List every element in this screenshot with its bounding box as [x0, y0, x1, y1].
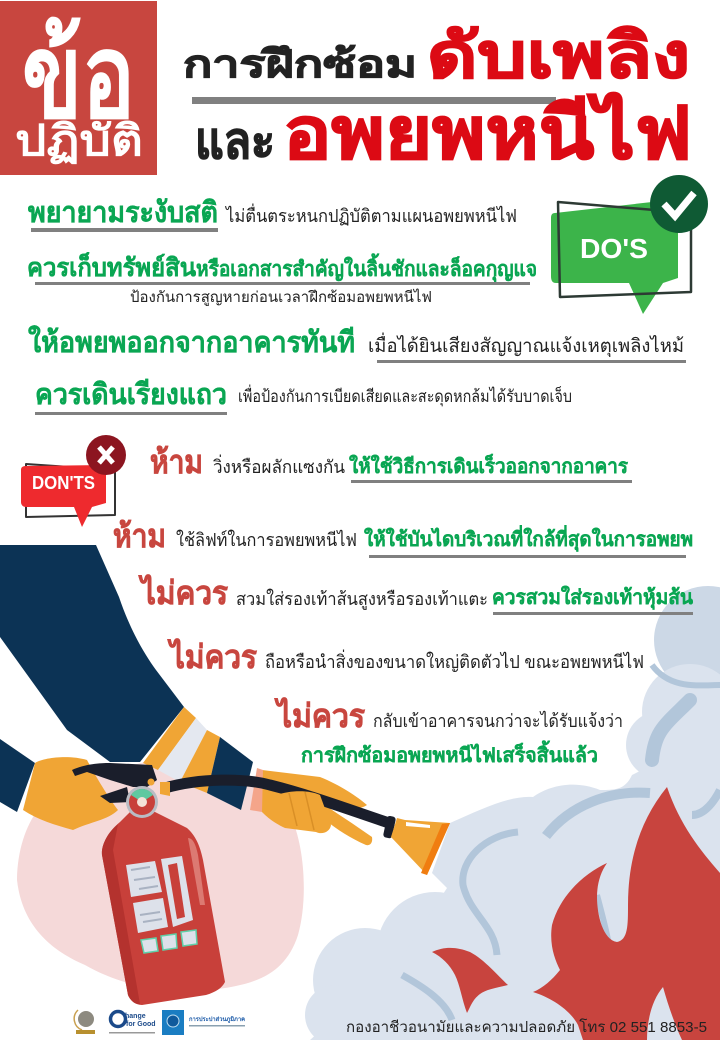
don't item 3 [138, 574, 693, 615]
illustration: left forearm sleeve [0, 739, 35, 812]
illustration: pink blob behind extinguisher [17, 757, 304, 991]
don't item 3: สวมใส่รองเท้าส้นสูงหรือรองเท้าแตะ [236, 588, 488, 610]
logo: provincial waterworks: การประปาส่วนภูมิภาค [189, 1015, 245, 1024]
do item 1: พยายามระงับสติ [28, 197, 218, 229]
extinguisher label panels [126, 861, 162, 897]
do item 3: ให้อพยพออกจากอาคารทันที [28, 325, 355, 359]
illustration: extinguisher body [102, 812, 225, 1005]
do item 2: ควรเก็บทรัพย์สิน [27, 252, 196, 282]
don't item 1: วิ่งหรือผลักแซงกัน [213, 454, 345, 477]
do item 2: ป้องกันการสูญหายก่อนเวลาฝึกซ้อมอพยพหนีไฟ [130, 288, 432, 306]
logo: change for good: hange [125, 1013, 146, 1020]
do item 4: ควรเดินเรียงแถว [35, 379, 227, 411]
icon: DO'S speech bubble: DO'S [580, 233, 648, 264]
illustration: nozzle [391, 818, 450, 875]
don't item 3: ควรสวมใส่รองเท้าหุ้มส้น [492, 585, 693, 610]
don't item 2: ให้ใช้บันไดบริเวณที่ใกล้ที่สุดในการอพยพ [364, 524, 693, 552]
do item 4: เพื่อป้องกันการเบียดเสียดและสะดุดหกล้มได้รับบาดเจ็บ [238, 384, 572, 407]
don't item 2: ใช้ลิฟท์ในการอพยพหนีไฟ [176, 529, 357, 550]
illustration: right glove palm [262, 770, 367, 812]
illustration: small flame [432, 948, 508, 1013]
don't item 5: ไม่ควร [274, 697, 365, 734]
don't item 4 [167, 638, 644, 675]
footer contact: กองอาชีวอนามัยและความปลอดภัย โทร 02 551 8853-5 [346, 1018, 707, 1036]
illustration: large flame [533, 787, 720, 1040]
do item 3 [28, 325, 686, 363]
don't item 2 [113, 518, 693, 558]
title: การฝึกซ้อม [183, 44, 417, 86]
icon: DON'TS speech bubble: DON'TS [32, 473, 95, 493]
illustration: smoke shadow arcs [402, 665, 720, 1020]
title: อพยพหนีไฟ [283, 91, 692, 174]
illustration: extinguisher gauge [126, 786, 158, 818]
header panel: ข้อปฏิบัติ: ข้อ [22, 11, 135, 143]
do item 4 [35, 379, 572, 415]
illustration: index finger [317, 800, 372, 845]
do item 1: ไม่ตื่นตระหนกปฏิบัติตามแผนอพยพหนีไฟ [224, 203, 517, 226]
extinguisher label lines [131, 867, 162, 922]
logo: provincial waterworks [162, 1010, 245, 1035]
extinguisher highlight [188, 838, 205, 905]
title: และ [195, 113, 275, 169]
header panel: ข้อปฏิบัติ [0, 1, 157, 175]
icon: DON'TS speech bubble [21, 435, 126, 527]
illustration: right glove fingers [262, 791, 331, 833]
logo: department emblem [74, 1010, 95, 1034]
don't item 2: ห้าม [113, 518, 166, 554]
illustration: extinguisher handle and hose [72, 763, 396, 839]
header panel: ข้อปฏิบัติ: ปฏิบัติ [15, 117, 143, 164]
extinguisher small squares [141, 930, 197, 953]
don't item 5: การฝึกซ้อมอพยพหนีไฟเสร็จสิ้นแล้ว [301, 740, 598, 767]
title [183, 22, 692, 174]
don't item 1: ห้าม [150, 444, 203, 480]
do item 2 [27, 252, 537, 306]
do item 1 [28, 197, 517, 232]
don't item 5: กลับเข้าอาคารจนกว่าจะได้รับแจ้งว่า [373, 710, 623, 731]
illustration: firefighter upper sleeve [0, 545, 184, 762]
logo: change for good: for Good [126, 1021, 156, 1028]
don't item 5 [274, 697, 623, 767]
title: ดับเพลิง [427, 22, 690, 91]
illustration: left glove [23, 757, 118, 830]
logo: change for good [109, 1012, 156, 1034]
illustration: cuff stripes [143, 707, 253, 810]
don't item 1: ให้ใช้วิธีการเดินเร็วออกจากอาคาร [349, 453, 628, 478]
do item 2: หรือเอกสารสำคัญในลิ้นชักและล็อคกุญแจ [196, 253, 537, 283]
don't item 4: ไม่ควร [167, 638, 257, 675]
icon: DO'S speech bubble [551, 175, 708, 314]
don't item 4: ถือหรือนำสิ่งของขนาดใหญ่ติดตัวไป ขณะอพยพหนีไฟ [265, 649, 644, 672]
don't item 1 [150, 444, 632, 483]
illustration: glove cuff [250, 768, 263, 812]
don't item 3: ไม่ควร [138, 574, 228, 611]
illustration: smoke cloud [305, 586, 720, 1040]
do item 3: เมื่อได้ยินเสียงสัญญาณแจ้งเหตุเพลิงไหม้ [368, 332, 684, 358]
